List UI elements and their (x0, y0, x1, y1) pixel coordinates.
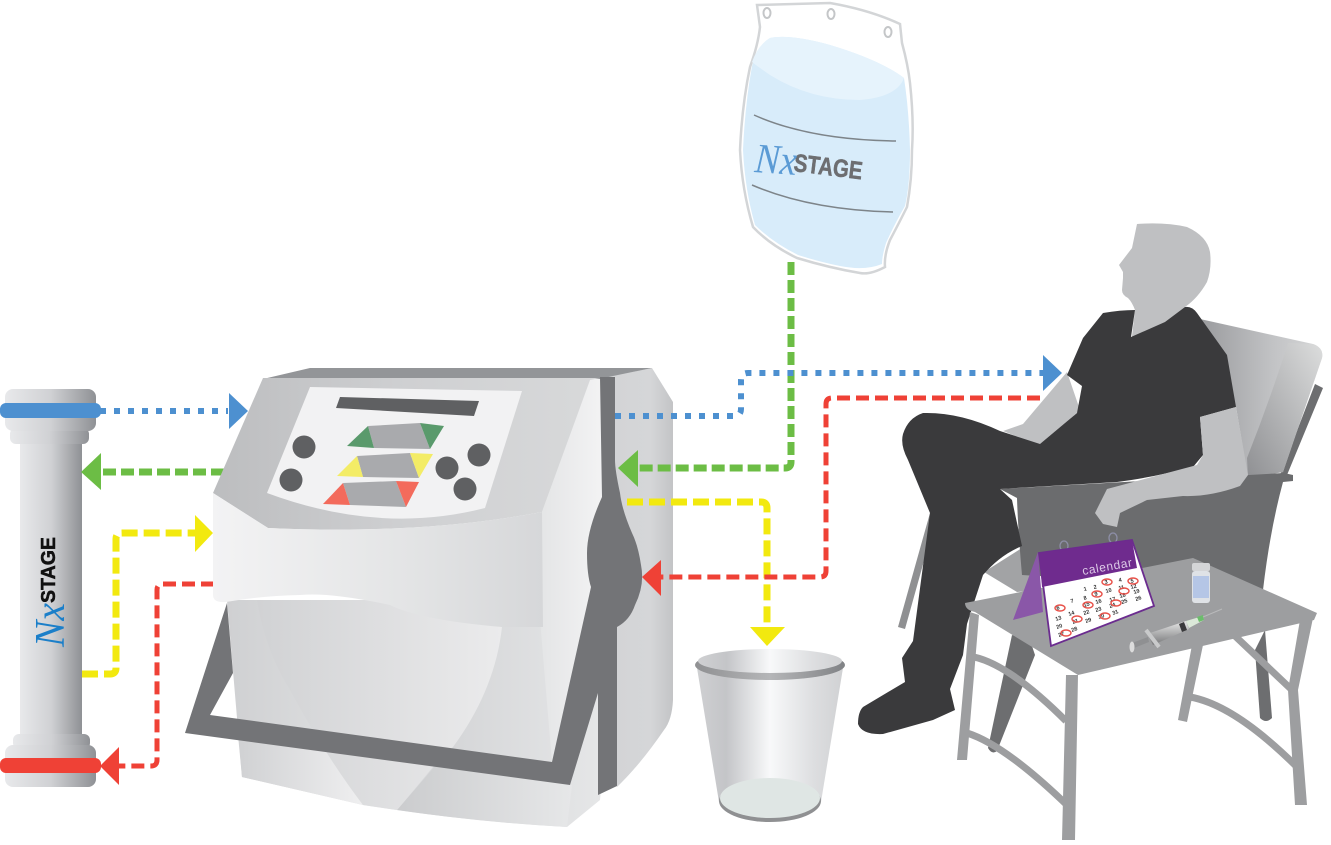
calendar dates: 3 (1104, 579, 1108, 586)
fluid bag (740, 3, 913, 273)
chair front leg (988, 635, 1035, 752)
circled treatment days (1055, 578, 1138, 636)
calendar dates: 27 (1058, 631, 1065, 639)
calendar rings (1060, 533, 1117, 551)
calendar (1013, 533, 1154, 646)
table stretchers (967, 636, 1298, 806)
red outlet band (0, 758, 101, 773)
calendar dates: 24 (1109, 602, 1117, 610)
seated patient (858, 223, 1248, 734)
calendar dates: 28 (1071, 626, 1078, 634)
calendar dates: 21 (1072, 618, 1079, 626)
machine side panel (598, 368, 673, 787)
calendar dates: 23 (1095, 606, 1102, 614)
flow arrow: green machine to column (81, 453, 224, 490)
calendar dates: 11 (1118, 585, 1125, 592)
table top (965, 558, 1317, 675)
calendar dates: 17 (1109, 596, 1116, 604)
chair backrest (1200, 319, 1322, 478)
patient right arm (1095, 407, 1248, 527)
calendar dates: 1 (1083, 586, 1087, 593)
calendar header (1039, 540, 1137, 587)
yellow key (337, 453, 433, 478)
calendar dates: 15 (1083, 601, 1090, 609)
calendar dates: 31 (1112, 609, 1119, 617)
calendar dates: 4 (1118, 577, 1123, 584)
left buttons (280, 436, 316, 492)
calendar dates: 7 (1070, 598, 1074, 605)
calendar dates (1055, 577, 1142, 639)
calendar dates: 2 (1093, 584, 1097, 591)
machine dark frame (185, 377, 642, 795)
calendar dates: 30 (1098, 613, 1105, 621)
calendar dates: 19 (1133, 588, 1140, 596)
calendar stand (1013, 552, 1043, 620)
calendar dates: 25 (1121, 598, 1128, 606)
bin bottom (719, 778, 821, 822)
machine lower left facet (238, 735, 363, 805)
patient head and neck (1119, 223, 1211, 345)
machine top edge (263, 368, 652, 379)
bin rim (695, 649, 845, 680)
calendar dates: 26 (1135, 595, 1142, 603)
calendar dates: 18 (1119, 592, 1126, 600)
flow arrow: yellow machine to waste bin (627, 502, 785, 646)
machine lower right facet (397, 765, 572, 827)
bag label lines (752, 115, 896, 212)
machine front band (213, 493, 543, 627)
machine lower front (227, 600, 617, 827)
patient left arm (1003, 372, 1080, 446)
calendar dates: 29 (1085, 617, 1092, 625)
table legs (957, 612, 1313, 840)
machine front shield (257, 600, 502, 810)
calendar title: calendar (1081, 555, 1134, 578)
calendar dates: 12 (1130, 584, 1137, 591)
waste bin (695, 649, 845, 822)
chair (898, 319, 1323, 752)
column logo: Nx (28, 603, 74, 648)
flow arrow: red machine to column (100, 584, 214, 785)
bag logo: STAGE (792, 149, 864, 185)
chair backrest frame (1280, 384, 1323, 475)
syringe (1130, 609, 1222, 652)
display slot (336, 397, 479, 416)
calendar dates: 9 (1094, 591, 1098, 598)
red key (323, 481, 419, 507)
machine light right panel (540, 379, 603, 762)
flow arrow: yellow column to machine (82, 515, 213, 674)
bag hanging holes (764, 8, 892, 37)
calendar dates: 20 (1056, 623, 1063, 631)
calendar page (1039, 540, 1154, 646)
flow arrow: red patient to machine (642, 398, 1040, 596)
calendar dates: 16 (1095, 598, 1102, 606)
bag air gap (752, 37, 904, 100)
dialyzer filter column (0, 389, 101, 787)
calendar dates: 22 (1083, 609, 1090, 617)
calendar dates: 8 (1083, 595, 1087, 602)
column logo: STAGE (38, 537, 60, 603)
chair backrest fold (1247, 343, 1322, 478)
side table (957, 558, 1317, 840)
blue inlet band (0, 403, 101, 418)
right buttons (436, 444, 490, 500)
green key (347, 423, 444, 449)
calendar dates: 10 (1105, 588, 1112, 595)
column logo (28, 537, 74, 648)
flow arrow: blue machine to patient (615, 355, 1062, 416)
dialysis machine (185, 368, 673, 827)
chair arm and side panel (1000, 473, 1293, 590)
bag logo: Nx (752, 136, 799, 185)
machine top face (213, 378, 600, 530)
bag logo (752, 136, 864, 185)
patient shirt and trousers (858, 307, 1236, 734)
control panel (267, 387, 522, 519)
calendar dates: 6 (1056, 605, 1060, 612)
chair rear leg right (1255, 630, 1272, 721)
bag fluid (743, 37, 910, 268)
flow arrow: green bag to machine (618, 262, 791, 487)
chair rear leg left (898, 513, 934, 629)
calendar dates: 14 (1068, 610, 1076, 618)
calendar dates: 5 (1130, 578, 1134, 585)
flow arrow: blue column to machine (100, 393, 248, 429)
calendar dates: 13 (1055, 615, 1062, 623)
medication vial (1192, 563, 1210, 603)
chair seat (984, 548, 1040, 592)
